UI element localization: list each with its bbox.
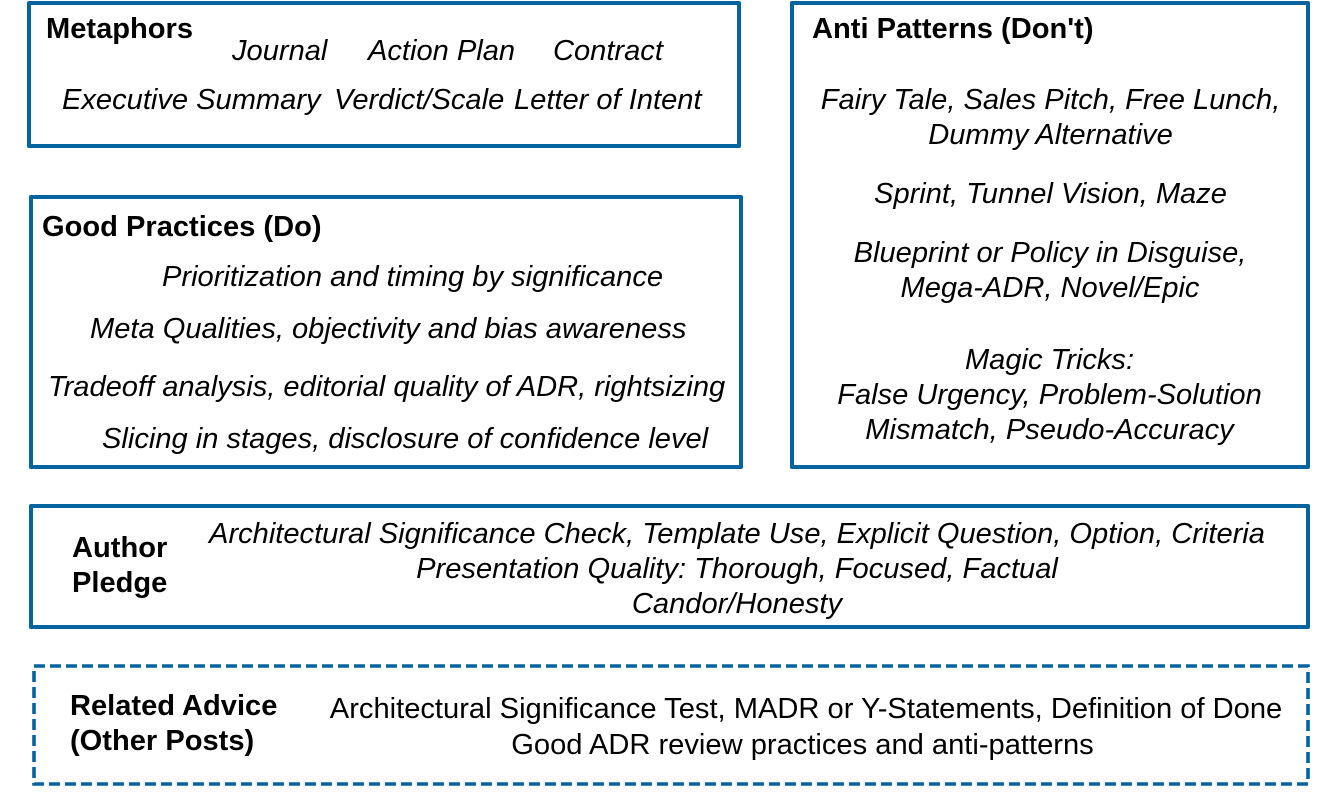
text: fairy tale group: Dummy Alternative xyxy=(928,119,1173,151)
text: verdict/scale: Verdict/Scale xyxy=(334,84,504,116)
text: magic tricks group: False Urgency, Problem-Solution xyxy=(837,379,1262,411)
heading: author pledge xyxy=(72,532,167,598)
text: magic tricks group xyxy=(837,344,1262,446)
text: tradeoff analysis: Tradeoff analysis, editorial quality of ADR, rightsizing xyxy=(48,371,725,403)
heading: good practices: Good Practices (Do) xyxy=(42,210,322,242)
text: executive summary: Executive Summary xyxy=(62,84,321,116)
heading: related advice: Related Advice xyxy=(70,690,277,722)
heading: anti patterns: Anti Patterns (Don't) xyxy=(812,12,1094,44)
heading: related advice xyxy=(70,690,277,756)
panel: anti patterns xyxy=(790,1,1310,469)
heading: metaphors: Metaphors xyxy=(46,12,193,44)
panel: metaphors xyxy=(27,1,741,148)
panel: author pledge xyxy=(29,504,1310,629)
text: contract: Contract xyxy=(553,34,663,66)
text: author pledge items: Presentation Quality: Thorough, Focused, Factual xyxy=(416,553,1058,585)
text: related advice items xyxy=(330,693,1282,761)
text: author pledge items: Architectural Significance Check, Template Use, Explicit Question, Option, Criteria xyxy=(209,518,1265,550)
panel: related advice xyxy=(32,664,1310,786)
text: letter of intent: Letter of Intent xyxy=(514,84,702,116)
heading: author pledge: Pledge xyxy=(72,566,167,598)
text: related advice items: Architectural Significance Test, MADR or Y-Statements, Definition of Done xyxy=(330,693,1282,725)
panel: good practices xyxy=(29,195,743,469)
text: prioritization: Prioritization and timing by significance xyxy=(162,261,663,293)
text: author pledge items: Candor/Honesty xyxy=(632,588,842,620)
text: blueprint group: Blueprint or Policy in Disguise, xyxy=(854,237,1246,269)
text: journal: Journal xyxy=(232,34,327,66)
text: blueprint group: Mega-ADR, Novel/Epic xyxy=(901,272,1199,304)
text: blueprint group xyxy=(854,237,1246,304)
text: action plan: Action Plan xyxy=(368,34,515,66)
heading: author pledge: Author xyxy=(72,532,167,564)
heading: related advice: (Other Posts) xyxy=(70,724,254,756)
text: related advice items: Good ADR review practices and anti-patterns xyxy=(511,729,1094,761)
text: author pledge items xyxy=(208,518,1265,620)
text: magic tricks group: Magic Tricks: xyxy=(965,344,1134,376)
text: fairy tale group xyxy=(821,84,1280,151)
text: sprint group: Sprint, Tunnel Vision, Maze xyxy=(874,178,1227,210)
text: slicing in stages: Slicing in stages, disclosure of confidence level xyxy=(102,423,708,455)
text: fairy tale group: Fairy Tale, Sales Pitch, Free Lunch, xyxy=(821,84,1280,116)
text: meta qualities: Meta Qualities, objectivity and bias awareness xyxy=(90,313,686,345)
text: magic tricks group: Mismatch, Pseudo-Accuracy xyxy=(865,414,1234,446)
